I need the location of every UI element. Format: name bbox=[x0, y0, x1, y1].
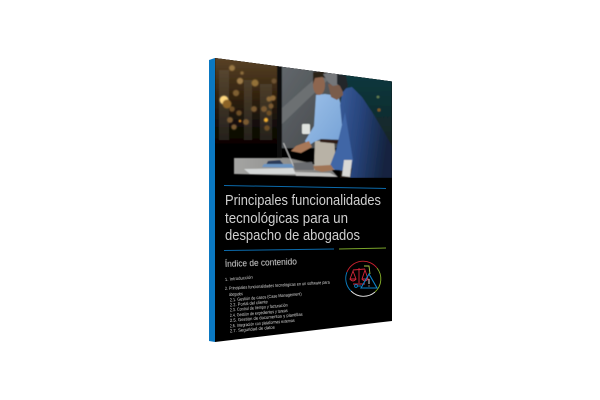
table of contents: abogados bbox=[229, 291, 244, 297]
title: despacho de abogados bbox=[225, 227, 360, 244]
divider rule: blue and green bbox=[224, 248, 386, 251]
top rule bbox=[224, 185, 386, 189]
title: Principales funcionalidades bbox=[225, 192, 381, 209]
section heading: Índice de contenido bbox=[225, 256, 297, 270]
laptop bbox=[283, 143, 294, 166]
title bbox=[225, 192, 381, 244]
table of contents: 2.6. Integración con plataformas externas bbox=[230, 318, 295, 328]
cover background bbox=[215, 58, 392, 342]
man right bbox=[330, 87, 392, 178]
title: tecnológicas para un bbox=[225, 210, 348, 227]
icon: justice scales and warning in circle bbox=[346, 261, 381, 296]
man left bbox=[314, 141, 337, 170]
book cover mockup bbox=[209, 58, 392, 342]
table of contents: 2.5. Gestión de documentos y plantillas bbox=[230, 312, 304, 323]
table of contents: 2. Principales funcionalidades tecnológicas en un software para bbox=[225, 280, 330, 291]
book spine bbox=[209, 58, 215, 342]
table of contents: 2.7. Seguridad de datos bbox=[230, 325, 276, 333]
table of contents: 2.2. Portal del cliente bbox=[230, 299, 268, 307]
table of contents: 2.1. Gestión de casos (Case Management) bbox=[230, 291, 302, 302]
table of contents: 1. Introducción bbox=[225, 275, 253, 282]
table of contents: 2.4. Gestión de expedientes y tareas bbox=[230, 308, 288, 318]
table of contents: 2.3. Control de tiempo y facturación bbox=[230, 302, 288, 312]
table of contents bbox=[225, 275, 330, 333]
table bbox=[234, 158, 338, 177]
cover photo: two men at a laptop bbox=[215, 55, 392, 180]
